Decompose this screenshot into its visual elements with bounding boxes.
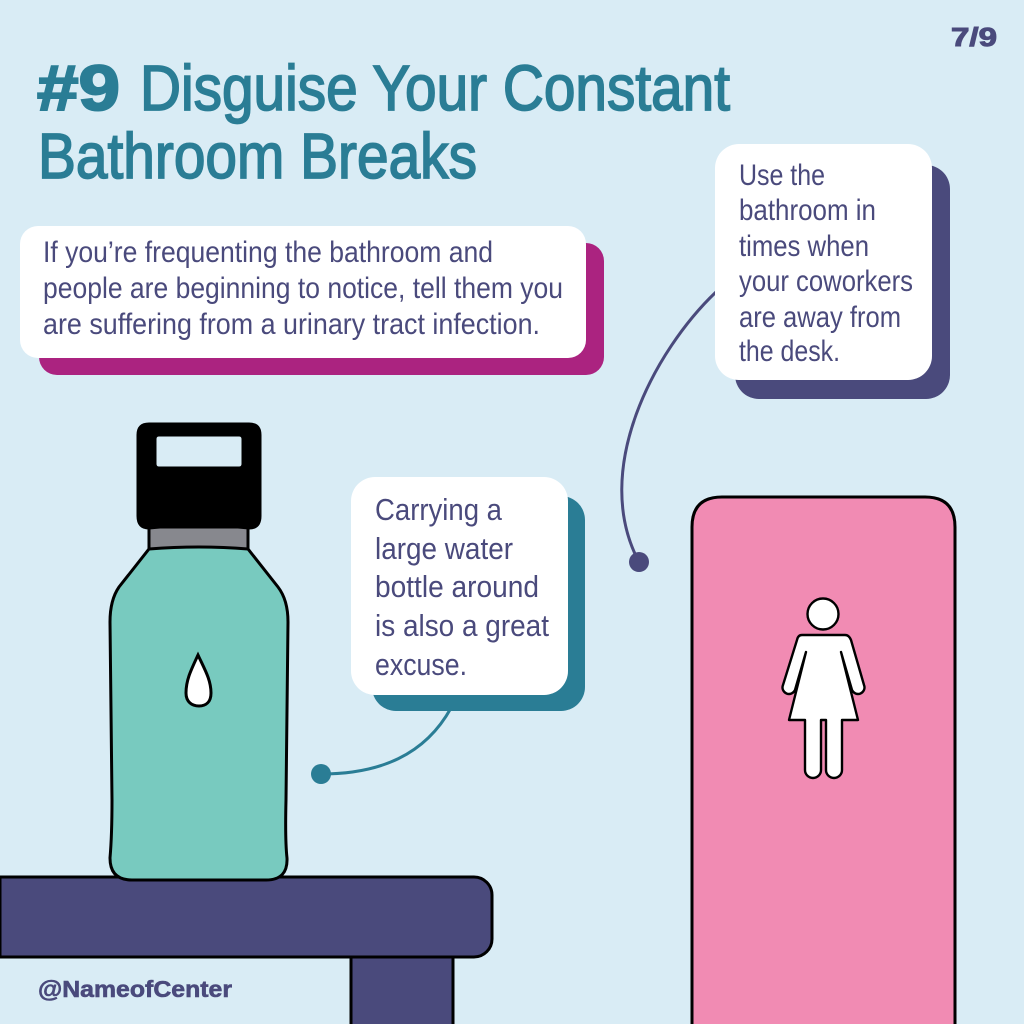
callout: use the bathroom: the desk. [739, 335, 840, 368]
callout: water bottle: large water [375, 531, 513, 566]
title: #9 [37, 52, 120, 124]
callout: use the bathroom: Use the [739, 159, 825, 192]
callout: urinary tract infection: If you’re frequenting the bathroom and [43, 236, 493, 269]
callout: water bottle: excuse. [375, 647, 467, 682]
bathroom door [692, 497, 955, 1024]
callout: use the bathroom: bathroom in [739, 194, 876, 227]
callout: urinary tract infection: are suffering from a urinary tract infection. [43, 308, 540, 341]
callout: water bottle: bottle around [375, 569, 539, 604]
title: Disguise Your Constant [140, 52, 730, 124]
connector: desk callout to door [622, 292, 716, 572]
title [37, 52, 730, 192]
callout: use the bathroom: times when [739, 230, 869, 263]
connector: water bottle callout to bottle [311, 708, 451, 784]
callout: water bottle: is also a great [375, 608, 549, 643]
callout: urinary tract infection [20, 226, 604, 375]
bottle neck [149, 527, 248, 550]
callout: water bottle: Carrying a [375, 492, 503, 527]
bottle cap [137, 423, 261, 529]
title: Bathroom Breaks [38, 120, 477, 192]
table [0, 877, 492, 1024]
icon: woman [783, 598, 864, 778]
water drop [186, 655, 211, 706]
callout: use the bathroom: your coworkers [739, 265, 913, 298]
callout: use the bathroom: are away from [739, 301, 901, 334]
bottle body [110, 547, 288, 880]
callout: use the bathroom [715, 144, 950, 399]
callout: urinary tract infection: people are beginning to notice, tell them you [43, 272, 563, 305]
water bottle [110, 423, 288, 880]
callout: water bottle [351, 477, 585, 711]
page number: 7/9 [951, 22, 997, 52]
handle: @NameofCenter [38, 976, 232, 1002]
